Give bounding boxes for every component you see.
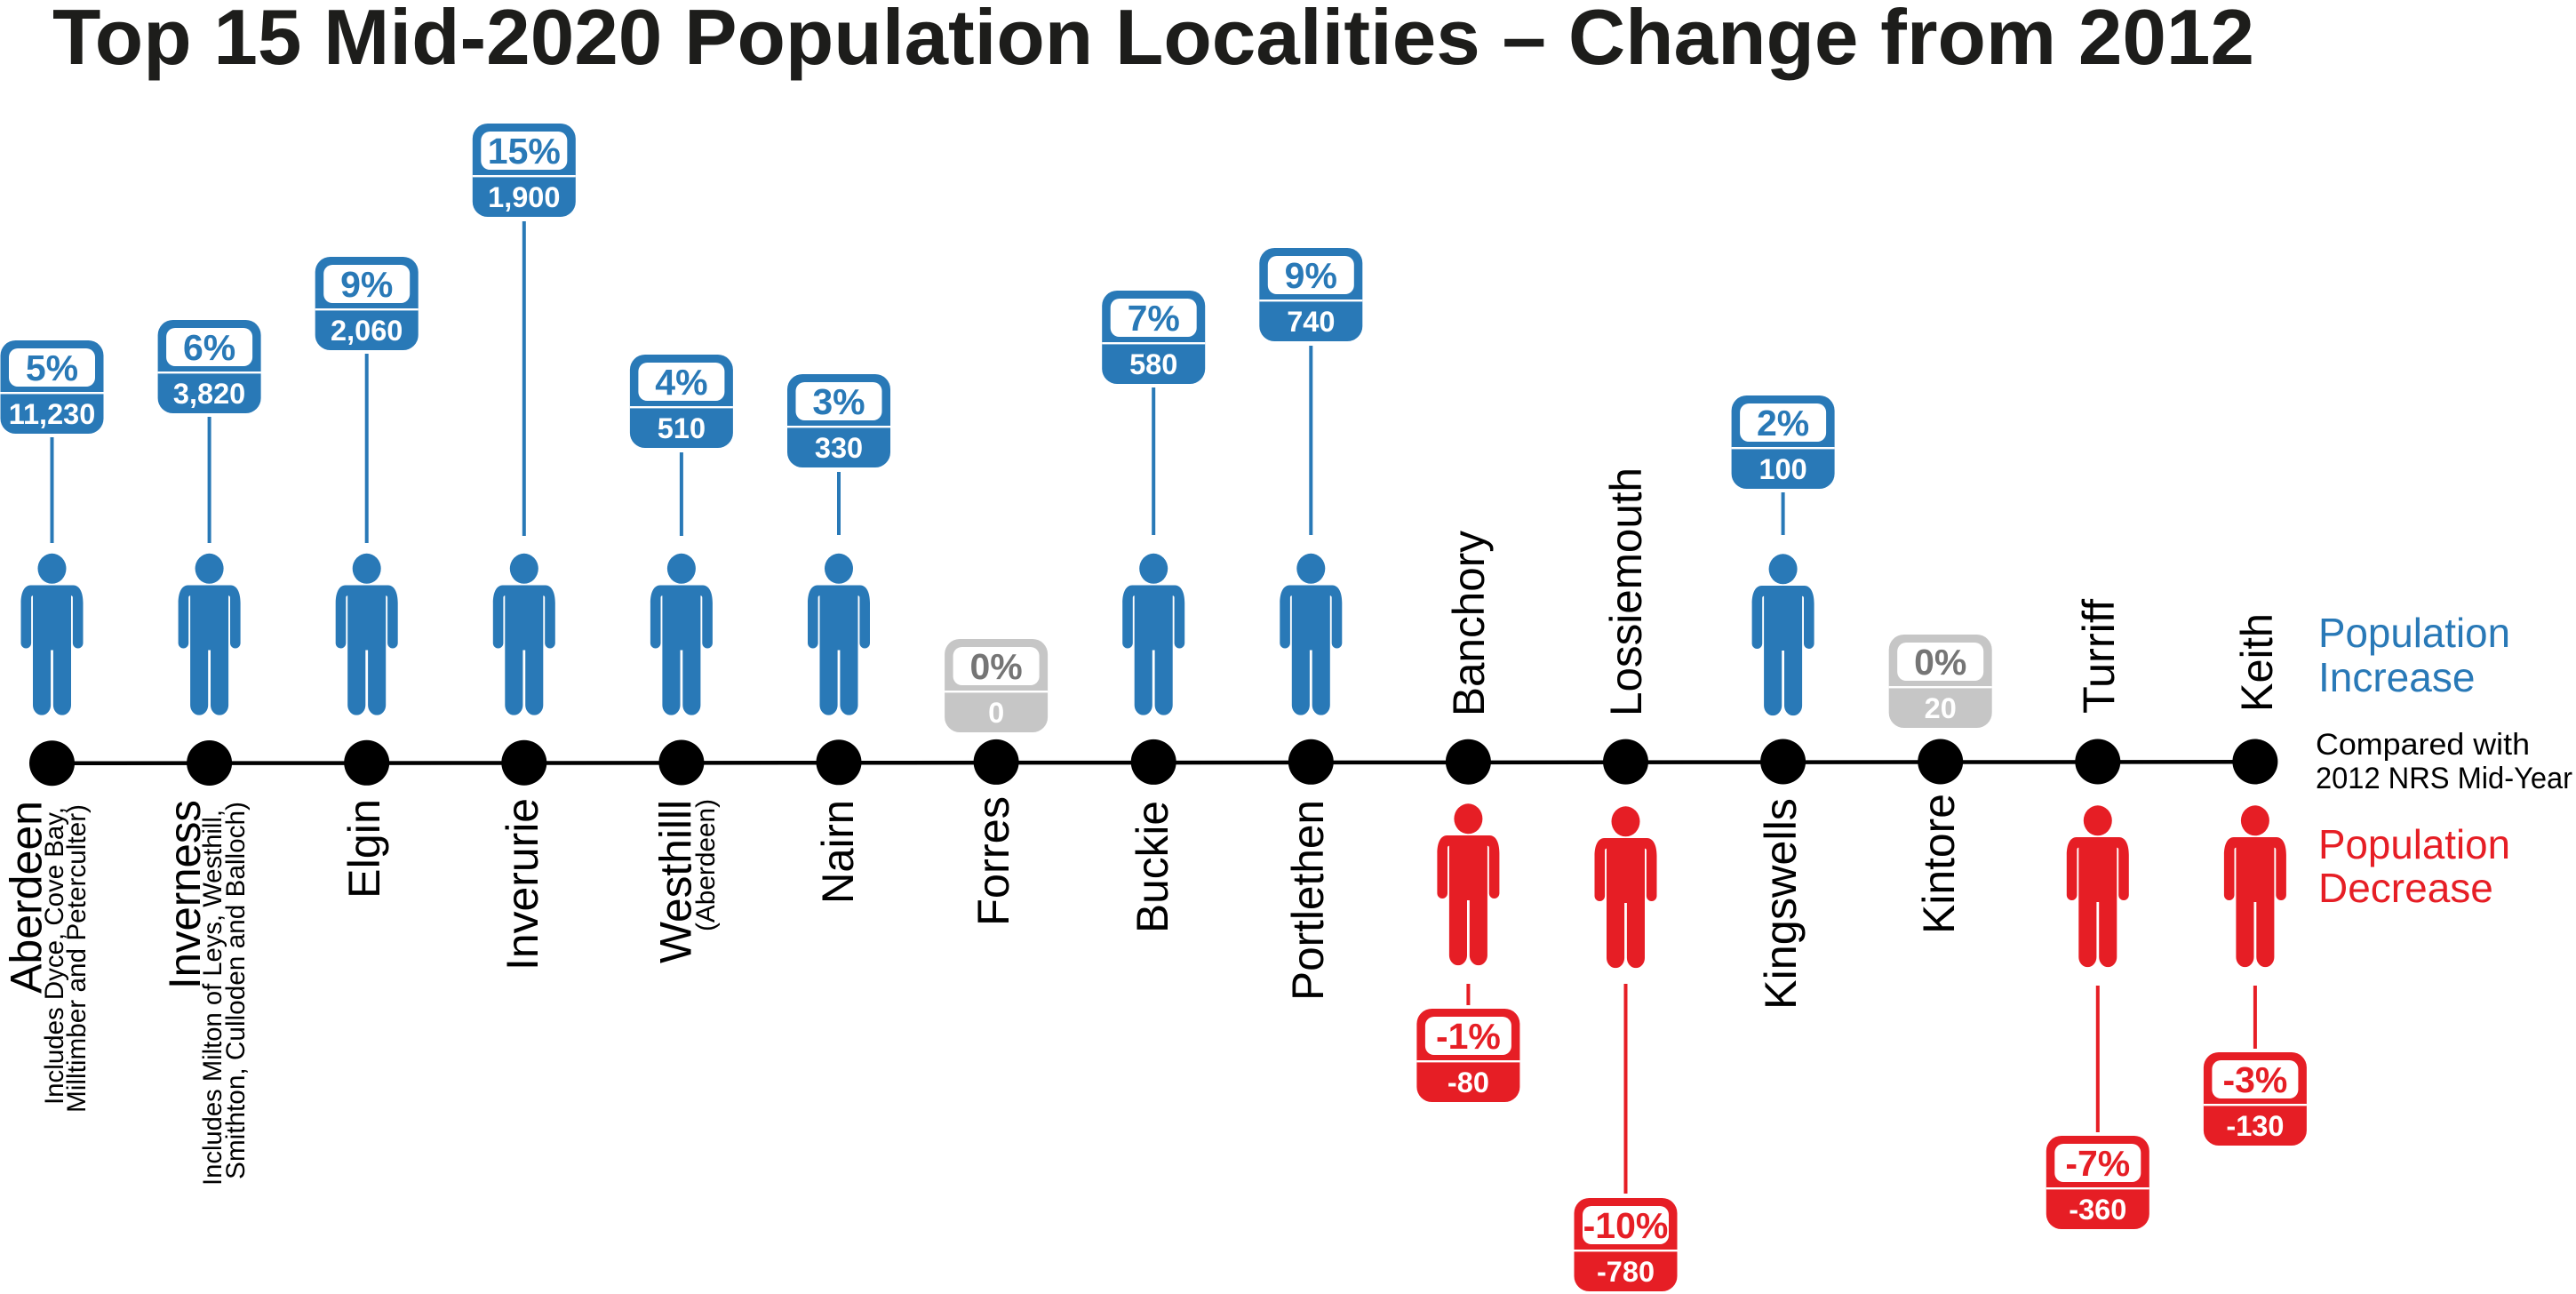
label: Forres: Forres [969,796,1018,926]
callout: Aberdeen: 11,230 [9,398,95,430]
legend: population decrease [2318,821,2510,911]
callout: Lossiemouth: -10% [1583,1205,1668,1246]
callout: Buckie [1102,291,1205,384]
callout: Nairn: 3% [812,381,865,422]
callout: Buckie: 580 [1129,348,1177,380]
dot [1288,739,1334,785]
callout: Elgin [315,257,419,350]
note: Aberdeen includes line 2: Milltimber and Peterculter) [62,804,92,1113]
legend: comparison note: 2012 NRS Mid-Year [2316,762,2572,795]
dot [1760,739,1806,784]
callout: Kingswells: 2% [1757,403,1809,443]
callout: Aberdeen [0,340,103,434]
icon: person increase [650,554,713,715]
legend: population increase: Increase [2318,654,2475,700]
callout: Westhill: 4% [655,362,708,403]
callout: Aberdeen: 5% [26,347,78,388]
callout: Inverness [158,320,261,413]
icon: person increase [1280,554,1342,715]
label: Nairn: Nairn [813,800,863,904]
callout: Banchory [1416,1009,1519,1102]
connector: Buckie [1152,387,1155,535]
icon: person increase [336,554,398,715]
dot [187,740,232,786]
dot [974,739,1019,785]
icon: person increase [179,554,241,715]
icon: person decrease [1594,806,1656,968]
locality: Kintore [1889,635,1992,934]
dot [29,740,75,786]
label: Elgin: Elgin [339,799,389,899]
dot [344,740,389,786]
locality: Turriff [2046,599,2149,1229]
timeline axis [52,762,2255,763]
icon: person increase [21,554,84,715]
note: Inverness includes: Includes Milton of Leys, Westhill, [198,810,227,1186]
connector: Banchory [1466,984,1470,1005]
dot [1918,739,1963,784]
callout: Portlethen: 740 [1287,306,1335,338]
callout: Elgin: 2,060 [331,315,403,347]
label: Kintore: Kintore [1914,794,1964,934]
connector: Lossiemouth [1624,984,1628,1194]
label: Turriff: Turriff [2074,599,2124,714]
legend: comparison note [2316,728,2572,795]
callout: Lossiemouth [1575,1198,1678,1291]
callout: Buckie: 7% [1128,298,1180,339]
callout: Banchory: -1% [1436,1016,1501,1057]
locality: Elgin [315,257,419,899]
icon: person increase [493,554,555,715]
callout: Nairn [787,374,890,467]
icon: person increase [1122,554,1184,715]
callout: Forres: 0% [969,646,1023,687]
callout: Nairn: 330 [815,432,863,464]
label: Kingswells: Kingswells [1756,798,1806,1010]
locality: Forres [945,639,1048,926]
callout: Keith [2204,1052,2307,1146]
callout: Elgin: 9% [340,264,393,305]
connector: Kingswells [1782,492,1785,535]
callout: Turriff: -7% [2065,1143,2130,1184]
legend: population increase: Population [2318,610,2510,656]
locality: Banchory [1416,531,1519,1102]
label: Lossiemouth: Lossiemouth [1601,467,1651,716]
locality: Westhill [630,355,733,963]
label: Aberdeen: Aberdeen [2,801,52,994]
connector: Keith [2253,986,2257,1049]
callout: Turriff [2046,1136,2149,1229]
callout: Turriff: -360 [2069,1194,2126,1226]
legend: population decrease: Population [2318,821,2510,867]
callout: Portlethen [1259,248,1362,341]
icon: person increase [808,554,870,715]
callout: Inverness: 6% [183,327,235,368]
callout: Keith: -130 [2226,1110,2284,1142]
callout: Westhill [630,355,733,448]
dot [501,740,546,786]
callout: Banchory: -80 [1448,1066,1489,1098]
callout: Inverurie [473,124,576,217]
callout: Kingswells [1732,395,1835,489]
label: Banchory: Banchory [1444,531,1494,716]
label: Portlethen: Portlethen [1283,800,1333,1001]
note: Inverness includes line 2: Smithton, Culloden and Balloch) [221,802,251,1179]
connector: Elgin [365,354,369,543]
label: Inverness: Inverness [160,800,210,989]
locality: Nairn [787,374,890,904]
dot [2075,739,2120,784]
label: Buckie: Buckie [1128,801,1177,933]
callout: Westhill: 510 [658,412,706,444]
connector: Nairn [837,472,841,535]
icon: person decrease [1437,803,1499,965]
callout: Kintore: 20 [1925,692,1957,724]
connector: Inverness [208,417,211,543]
callout: Kintore: 0% [1914,642,1966,683]
legend: comparison note: Compared with [2316,728,2530,762]
connector: Westhill [680,452,683,536]
note: Aberdeen includes: Includes Dyce, Cove Bay, [40,807,69,1105]
dot [658,739,704,786]
callout: Portlethen: 9% [1285,255,1337,296]
legend: population decrease: Decrease [2318,865,2493,911]
connector: Inverurie [522,221,526,536]
icon: person increase [1752,554,1814,715]
locality: Inverness [158,320,261,1186]
note: Westhill Aberdeen: (Aberdeen) [691,799,721,931]
locality: Keith [2204,613,2307,1146]
callout: Keith: -3% [2222,1059,2287,1100]
callout: Kingswells: 100 [1759,453,1807,485]
connector: Aberdeen [50,437,53,543]
callout: Forres [945,639,1048,732]
dot [816,739,862,785]
callout: Forres: 0 [988,697,1004,729]
callout: Inverurie: 15% [488,131,561,172]
icon: person decrease [2224,805,2286,967]
connector: Portlethen [1309,346,1312,535]
connector: Turriff [2096,986,2100,1132]
locality: Lossiemouth [1575,467,1678,1291]
dot [1131,739,1176,785]
label: Keith: Keith [2232,613,2282,712]
locality: Kingswells [1732,395,1835,1010]
label: Inverurie: Inverurie [498,798,547,970]
locality: Aberdeen [0,340,103,1113]
locality: Buckie [1102,291,1205,933]
dot [1446,739,1491,785]
callout: Lossiemouth: -780 [1597,1256,1655,1288]
callout: Kintore [1889,635,1992,728]
callout: Inverness: 3,820 [173,378,245,410]
dot [2232,739,2277,784]
locality: Portlethen [1259,248,1362,1001]
callout: Inverurie: 1,900 [488,181,560,213]
icon: person decrease [2067,805,2129,967]
label: Westhill: Westhilll [651,800,701,963]
locality: Inverurie [473,124,576,970]
legend: population increase [2318,610,2510,700]
dot [1603,739,1648,785]
